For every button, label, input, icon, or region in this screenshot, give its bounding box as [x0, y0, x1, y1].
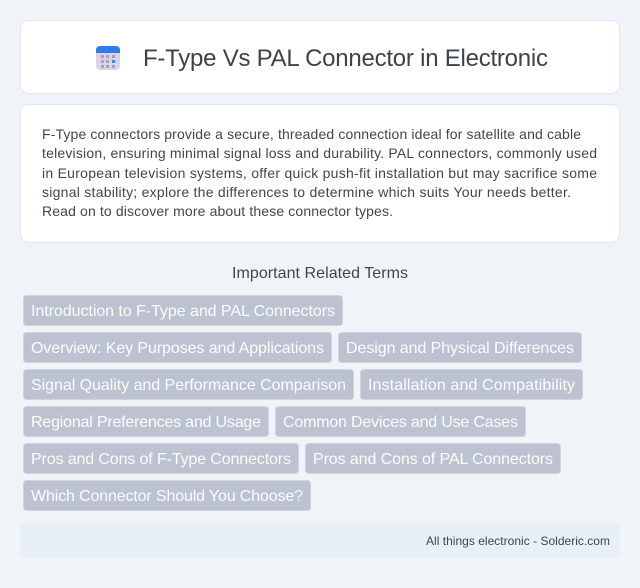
chip: overview: Overview: Key Purposes and Applications [31, 340, 324, 357]
chip: signal quality [24, 370, 354, 400]
chip: pros and cons f-type: Pros and Cons of F-Type Connectors [31, 451, 291, 468]
text block: intro paragraph: Read on to discover more about these connector types. [42, 203, 393, 219]
chip: signal quality: Signal Quality and Performance Comparison [31, 377, 346, 394]
icon: calendar [96, 46, 120, 70]
text block: intro paragraph: in European television systems, offer quick push-fit installation but may sacrifice some [42, 165, 597, 181]
heading: important related terms: Important Related Terms [232, 265, 408, 282]
chip: regional: Regional Preferences and Usage [31, 414, 261, 431]
chip: design: Design and Physical Differences [346, 340, 574, 357]
chip: introduction [24, 296, 342, 326]
footer [20, 524, 620, 558]
title: F-Type Vs PAL Connector in Electronic [143, 45, 548, 72]
chip: which connector: Which Connector Should You Choose? [31, 488, 303, 505]
chip: pros and cons pal [306, 444, 560, 474]
panel: intro description [20, 104, 620, 242]
panel: related term chips [24, 296, 582, 510]
footer: All things electronic - Solderic.com [426, 534, 610, 548]
text block: intro paragraph: signal stability; explore the differences to determine which suits Your needs better. [42, 184, 571, 200]
chip: which connector [24, 480, 310, 510]
chip: regional [24, 406, 268, 436]
chip: installation: Installation and Compatibility [368, 377, 575, 394]
text block: intro paragraph [42, 126, 597, 219]
chip: common devices: Common Devices and Use Cases [283, 414, 518, 431]
panel: title header [20, 20, 620, 94]
text block: intro paragraph: F-Type connectors provide a secure, threaded connection ideal for satellite and cable [42, 126, 581, 142]
text block: intro paragraph: television, ensuring minimal signal loss and durability. PAL connectors, commonly used [42, 145, 597, 161]
chip: design [338, 332, 582, 362]
chip: pros and cons pal: Pros and Cons of PAL Connectors [313, 451, 553, 468]
chip: common devices [276, 406, 526, 436]
chip: pros and cons f-type [24, 444, 298, 474]
chip: overview [24, 332, 332, 362]
chip: introduction: Introduction to F-Type and PAL Connectors [31, 303, 335, 320]
chip: installation [360, 370, 582, 400]
